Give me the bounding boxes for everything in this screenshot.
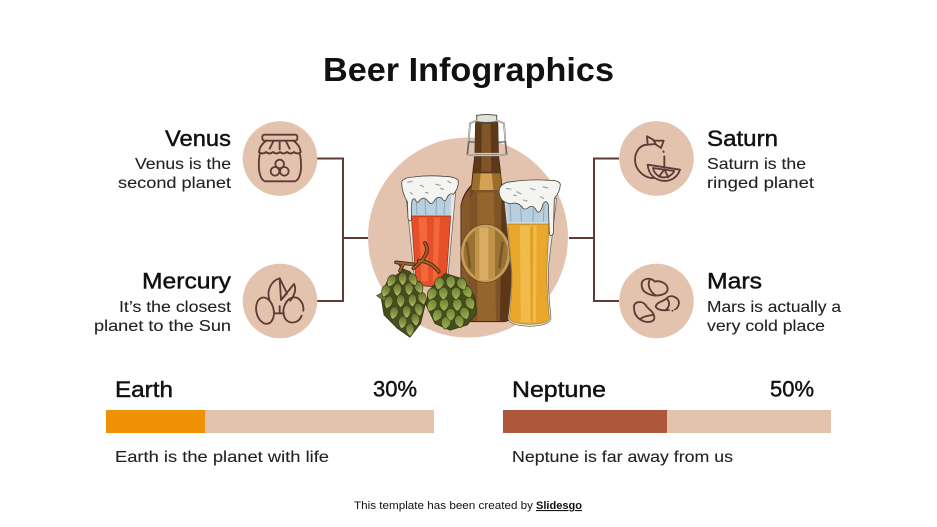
icon: beans bbox=[619, 264, 694, 338]
description: planet to the Sun bbox=[94, 318, 231, 335]
footer credit: Slidesgo bbox=[536, 500, 582, 512]
connector lines: right bbox=[569, 158, 619, 301]
progress bar bbox=[503, 410, 831, 433]
description bbox=[707, 156, 815, 192]
icon: pistachios bbox=[243, 264, 317, 338]
bottle cap and wire clasp bbox=[477, 114, 497, 122]
panel: Neptune progress bbox=[503, 376, 831, 466]
heading: Saturn bbox=[707, 126, 778, 151]
description: ringed planet bbox=[707, 175, 815, 192]
panel: Mercury bbox=[94, 264, 317, 338]
panel: Saturn bbox=[619, 121, 815, 196]
background circle bbox=[368, 138, 568, 338]
description: very cold place bbox=[707, 318, 825, 335]
bottle label bbox=[462, 226, 509, 281]
heading: Venus bbox=[165, 126, 231, 151]
description bbox=[118, 156, 232, 192]
description: Neptune is far away from us bbox=[512, 449, 733, 466]
description: Saturn is the bbox=[707, 156, 806, 173]
connector lines: left bbox=[317, 158, 368, 301]
panel: Venus bbox=[118, 121, 317, 196]
description: Mars is actually a bbox=[707, 299, 841, 316]
panel: Earth progress bbox=[106, 376, 434, 466]
heading: Mars bbox=[707, 268, 762, 294]
description bbox=[707, 299, 841, 335]
icon: honey jar bbox=[243, 121, 317, 196]
description bbox=[94, 299, 232, 335]
percentage: 50% bbox=[770, 376, 814, 402]
heading: Earth bbox=[115, 377, 173, 402]
progress bar bbox=[106, 410, 434, 433]
description: It’s the closest bbox=[119, 299, 232, 316]
hop cone: left bbox=[377, 262, 428, 337]
description: Earth is the planet with life bbox=[115, 449, 329, 466]
hop stem bbox=[396, 243, 439, 272]
description: Venus is the bbox=[135, 156, 231, 173]
footer credit: This template has been created by bbox=[354, 500, 534, 512]
red beer glass bbox=[402, 176, 458, 287]
panel: Mars bbox=[619, 264, 841, 338]
icon: citrus fruit bbox=[619, 121, 694, 196]
percentage: 30% bbox=[373, 376, 417, 402]
central illustration: beer and hops bbox=[368, 114, 568, 338]
title: Beer Infographics bbox=[323, 51, 614, 88]
heading: Mercury bbox=[142, 268, 231, 294]
bottle bbox=[461, 114, 512, 322]
heading: Neptune bbox=[512, 377, 606, 402]
hop cone: right bbox=[425, 273, 477, 330]
description: second planet bbox=[118, 175, 232, 192]
yellow beer glass bbox=[499, 180, 560, 326]
